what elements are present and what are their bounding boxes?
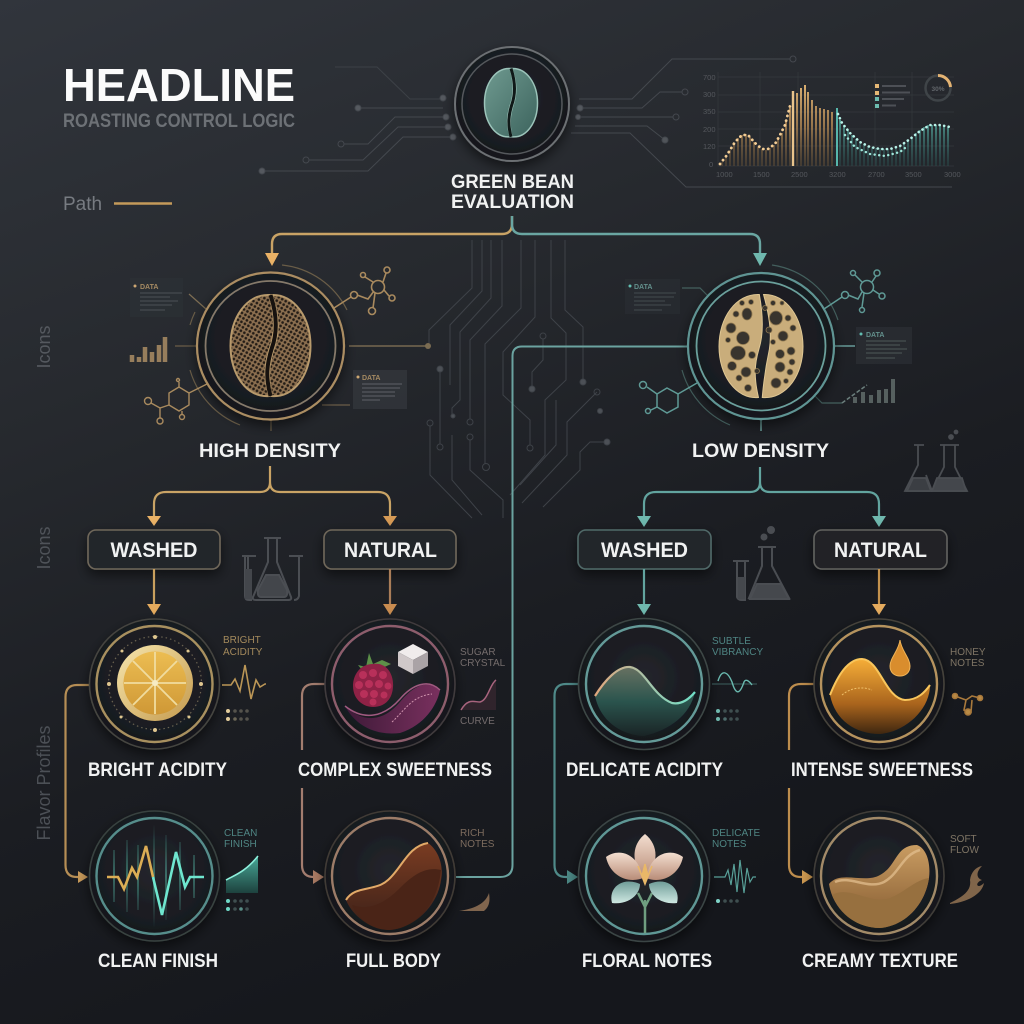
label: INTENSE SWEETNESS (791, 759, 973, 781)
data panel lower (353, 370, 407, 409)
icon: mini area chart (226, 856, 258, 893)
icon: honey wave (830, 659, 930, 734)
callout text: NOTES (950, 658, 985, 669)
arrow: washed to delicate acidity (637, 569, 651, 615)
dots (716, 709, 739, 721)
callout text (950, 647, 986, 669)
arrow: split to low density (512, 216, 767, 266)
chart axis labels: 2700 (868, 170, 885, 179)
icon: mini swoosh (459, 893, 489, 911)
chart axis labels: 120 (703, 142, 716, 151)
icon: flower (606, 834, 683, 933)
chart: roast curve (703, 72, 961, 179)
chart donut (926, 75, 950, 100)
node: creamy texture (802, 811, 984, 972)
chart axis labels: 3200 (829, 170, 846, 179)
callout text (460, 647, 506, 727)
callout text: FLOW (950, 845, 979, 856)
dots (226, 899, 249, 911)
callout text: HONEY (950, 647, 986, 658)
node: low density (625, 265, 912, 462)
callout text (223, 635, 263, 658)
molecule left (144, 378, 207, 424)
label: COMPLEX SWEETNESS (298, 759, 492, 781)
accents (175, 265, 350, 431)
label: HIGH DENSITY (199, 440, 341, 462)
legend: path: Path (63, 194, 102, 215)
callout text: BRIGHT (223, 635, 261, 646)
dotted curves (720, 106, 790, 164)
data panel upper: DATA (140, 284, 158, 291)
molecule right (824, 270, 885, 312)
callout text: SUBTLE (712, 636, 751, 647)
node: green bean evaluation (451, 47, 574, 213)
callout text: NOTES (712, 839, 747, 850)
central circuit traces (427, 240, 610, 518)
icon: cream swirl (829, 845, 929, 928)
pill: high density natural: NATURAL (344, 539, 437, 562)
icon: green bean (484, 68, 538, 137)
label: FULL BODY (346, 950, 441, 972)
legend: path (63, 194, 172, 215)
callout text (224, 828, 257, 850)
pill: high density natural (324, 530, 456, 569)
branch arrows: high density (147, 466, 397, 526)
arrow: natural to intense sweetness (872, 569, 886, 615)
label: LOW DENSITY (692, 440, 829, 462)
side connector: bright acidity to clean finish (66, 685, 90, 883)
chart legend (875, 84, 910, 108)
node: high density (130, 265, 407, 462)
label: FLORAL NOTES (582, 950, 712, 972)
bar mini chart (132, 337, 165, 362)
label: BRIGHT ACIDITY (88, 759, 227, 781)
icon: sine (712, 683, 757, 685)
side connector: complex sweetness to full body (302, 684, 326, 884)
molecule left (640, 382, 697, 414)
data panel lower: DATA (866, 332, 884, 339)
bar mini chart (842, 379, 893, 403)
arrow: washed to bright acidity (147, 569, 161, 615)
headline: HEADLINE (63, 59, 295, 111)
label: DELICATE ACIDITY (566, 759, 723, 781)
icon: porous bean (719, 294, 803, 398)
flask icon upper right (905, 430, 967, 491)
pill: high density washed: WASHED (110, 539, 198, 562)
data panel upper (130, 278, 183, 317)
icon: sound wave (714, 860, 756, 893)
side label: icons lower: Icons (34, 526, 54, 570)
node: delicate acidity (566, 618, 763, 781)
callout text (950, 834, 979, 856)
callout text: FINISH (224, 839, 257, 850)
callout text (460, 828, 495, 850)
callout text: CURVE (460, 716, 495, 727)
side connector: intense sweetness to creamy texture (789, 684, 815, 884)
icon: pulse wave (107, 824, 204, 928)
arrow: low density to full body long connector (456, 346, 690, 877)
node: full body (325, 811, 495, 972)
chart axis labels: 1000 (716, 170, 733, 179)
pill: high density washed (88, 530, 220, 569)
pill: low density washed (578, 530, 711, 569)
circuit traces top (259, 56, 952, 187)
side label: flavor profiles: Flavor Profiles (34, 725, 54, 841)
callout text: SUGAR (460, 647, 496, 658)
data panel upper (625, 279, 680, 314)
branch arrows: low density (637, 467, 886, 527)
label: CLEAN FINISH (98, 950, 218, 972)
node: clean finish (90, 811, 258, 972)
icon: raspberry (353, 653, 393, 707)
chart axis labels: 0 (709, 160, 713, 169)
side label: icons upper: Icons (34, 325, 54, 369)
title block (63, 59, 295, 132)
dots (716, 899, 739, 903)
icon: mini curve (461, 680, 496, 710)
pill: low density natural: NATURAL (834, 539, 927, 562)
connector: high density to circuit (349, 343, 431, 349)
icon: acidity wave (595, 667, 695, 736)
chart axis labels: 3000 (944, 170, 961, 179)
icon: honey drop (890, 640, 910, 676)
icon: lemon slice (117, 645, 193, 721)
data panel lower: DATA (362, 375, 380, 382)
callout text: DELICATE (712, 828, 760, 839)
chart axis labels: 700 (703, 73, 716, 82)
gold bars (722, 85, 832, 166)
chart axis labels: 1500 (753, 170, 770, 179)
node: bright acidity (88, 619, 266, 781)
chart axis labels: 300 (703, 90, 716, 99)
accents (682, 265, 855, 431)
subtitle: ROASTING CONTROL LOGIC (63, 111, 295, 132)
chart axis labels (703, 73, 961, 179)
molecule right (334, 267, 395, 314)
icon: mini flow (950, 866, 984, 904)
chart axis labels: 350 (703, 107, 716, 116)
label: GREEN BEAN (451, 171, 574, 193)
teal bars (840, 120, 948, 166)
node: floral notes (578, 810, 760, 972)
chart axis labels: 2500 (791, 170, 808, 179)
callout text (712, 828, 760, 850)
label: CREAMY TEXTURE (802, 950, 958, 972)
icon: molecule (952, 694, 982, 715)
label: EVALUATION (451, 191, 574, 213)
icon: pulse (222, 665, 266, 699)
label (451, 171, 574, 213)
callout text: SOFT (950, 834, 977, 845)
callout text (712, 636, 763, 658)
dots (226, 709, 249, 721)
side connector: delicate acidity to floral notes (554, 684, 579, 884)
data panel upper: DATA (634, 284, 652, 291)
icon: sugar cube (398, 644, 428, 674)
icon: body wave (346, 843, 442, 930)
flask icon right (733, 527, 789, 600)
icon: swirl (345, 684, 440, 733)
arrow: natural to complex sweetness (383, 569, 397, 615)
chart axis labels: 200 (703, 125, 716, 134)
pill: low density washed: WASHED (601, 539, 688, 562)
callout text: NOTES (460, 839, 495, 850)
chart axis labels: 3500 (905, 170, 922, 179)
callout text: VIBRANCY (712, 647, 763, 658)
node: intense sweetness (791, 619, 986, 781)
arrow: split to high density (265, 216, 512, 266)
callout text: CLEAN (224, 828, 257, 839)
pill: low density natural (814, 530, 947, 569)
flask icon left (242, 538, 303, 600)
icon: dense bean (230, 294, 312, 398)
callout text: ACIDITY (223, 647, 263, 658)
node: complex sweetness (298, 619, 506, 781)
callout text: RICH (460, 828, 484, 839)
data panel lower (856, 327, 912, 364)
callout text: CRYSTAL (460, 658, 506, 669)
chart donut: 30% (931, 86, 945, 93)
